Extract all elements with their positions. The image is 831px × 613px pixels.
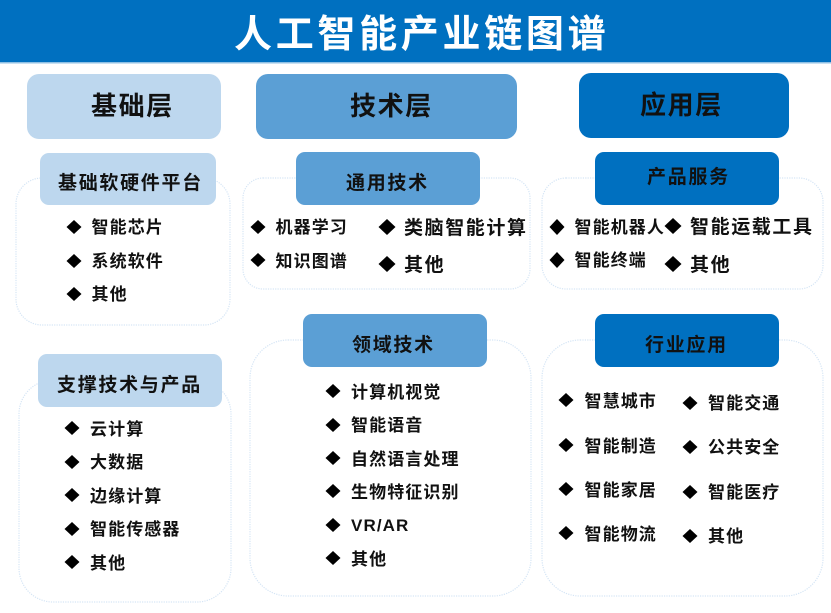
list: 支撑技术与产品 items: 大数据 [90, 453, 144, 472]
subheading: 领域技术: 领域技术 [352, 334, 435, 356]
list: 产品服务 items: 其他 [690, 254, 731, 276]
list: 行业应用 items: 公共安全 [708, 437, 780, 457]
list: 支撑技术与产品 items: 云计算 [90, 419, 144, 439]
subheading: 通用技术: 通用技术 [346, 172, 429, 194]
list: 产品服务 items [550, 216, 814, 276]
list: 产品服务 items: 智能运载工具 [690, 216, 814, 238]
list: 基础软硬件平台 items [66, 217, 164, 304]
heading: 技术层: 技术层 [350, 91, 433, 121]
list: 支撑技术与产品 items: 边缘计算 [90, 486, 162, 506]
title banner: 人工智能产业链图谱 [234, 14, 609, 56]
list: 领域技术 items: 计算机视觉 [351, 382, 442, 402]
subheading: 产品服务: 产品服务 [647, 166, 730, 188]
subheading: 基础软硬件平台 [40, 153, 216, 205]
list: 通用技术 items [250, 216, 528, 276]
panel: 产品服务 outline [542, 178, 823, 289]
list: 领域技术 items [326, 382, 460, 569]
list: 行业应用 items: 智能交通 [708, 393, 780, 413]
panel: 领域技术 outline [250, 340, 531, 596]
subheading: 通用技术 [296, 152, 480, 205]
panel: 通用技术 outline [243, 178, 530, 289]
panel: 行业应用 outline [542, 340, 823, 596]
list: 基础软硬件平台 items: 智能芯片 [92, 217, 164, 237]
heading: 基础层 [27, 74, 221, 139]
list: 基础软硬件平台 items: 其他 [92, 285, 128, 304]
subheading: 领域技术 [303, 314, 487, 367]
list: 通用技术 items: 类脑智能计算 [404, 216, 528, 239]
heading: 技术层 [256, 74, 517, 139]
panel: 支撑技术与产品 outline [19, 380, 231, 602]
panel: 基础软硬件平台 outline [16, 178, 230, 325]
list: 通用技术 items: 机器学习 [276, 217, 348, 237]
subheading: 基础软硬件平台: 基础软硬件平台 [58, 171, 203, 194]
heading: 应用层 [579, 73, 789, 138]
subheading: 产品服务 [595, 152, 779, 205]
heading: 应用层: 应用层 [640, 90, 723, 120]
list: 支撑技术与产品 items [64, 419, 180, 573]
list: 领域技术 items: 自然语言处理 [351, 449, 460, 469]
list: 行业应用 items [558, 391, 780, 546]
list: 领域技术 items: 智能语音 [351, 415, 423, 435]
list: 行业应用 items: 其他 [708, 527, 744, 546]
list: 产品服务 items: 智能机器人 [574, 217, 665, 237]
list: 通用技术 items: 知识图谱 [276, 252, 348, 271]
heading: 基础层: 基础层 [91, 91, 174, 121]
list: 领域技术 items: 生物特征识别 [351, 483, 460, 502]
list: 领域技术 items: VR/AR [351, 516, 409, 535]
list: 行业应用 items: 智能医疗 [708, 482, 780, 502]
subheading: 行业应用: 行业应用 [645, 333, 728, 356]
title banner [0, 0, 831, 64]
subheading: 行业应用 [595, 314, 779, 367]
list: 行业应用 items: 智能物流 [584, 524, 657, 544]
list: 通用技术 items: 其他 [404, 254, 445, 276]
list: 行业应用 items: 智能制造 [584, 436, 657, 456]
list: 产品服务 items: 智能终端 [574, 250, 647, 270]
list: 支撑技术与产品 items: 智能传感器 [90, 519, 180, 539]
list: 行业应用 items: 智能家居 [584, 480, 657, 500]
list: 行业应用 items: 智慧城市 [584, 391, 657, 411]
subheading: 支撑技术与产品: 支撑技术与产品 [57, 374, 202, 396]
list: 支撑技术与产品 items: 其他 [90, 554, 126, 573]
subheading: 支撑技术与产品 [38, 354, 222, 407]
list: 领域技术 items: 其他 [351, 550, 387, 569]
list: 基础软硬件平台 items: 系统软件 [92, 251, 164, 271]
